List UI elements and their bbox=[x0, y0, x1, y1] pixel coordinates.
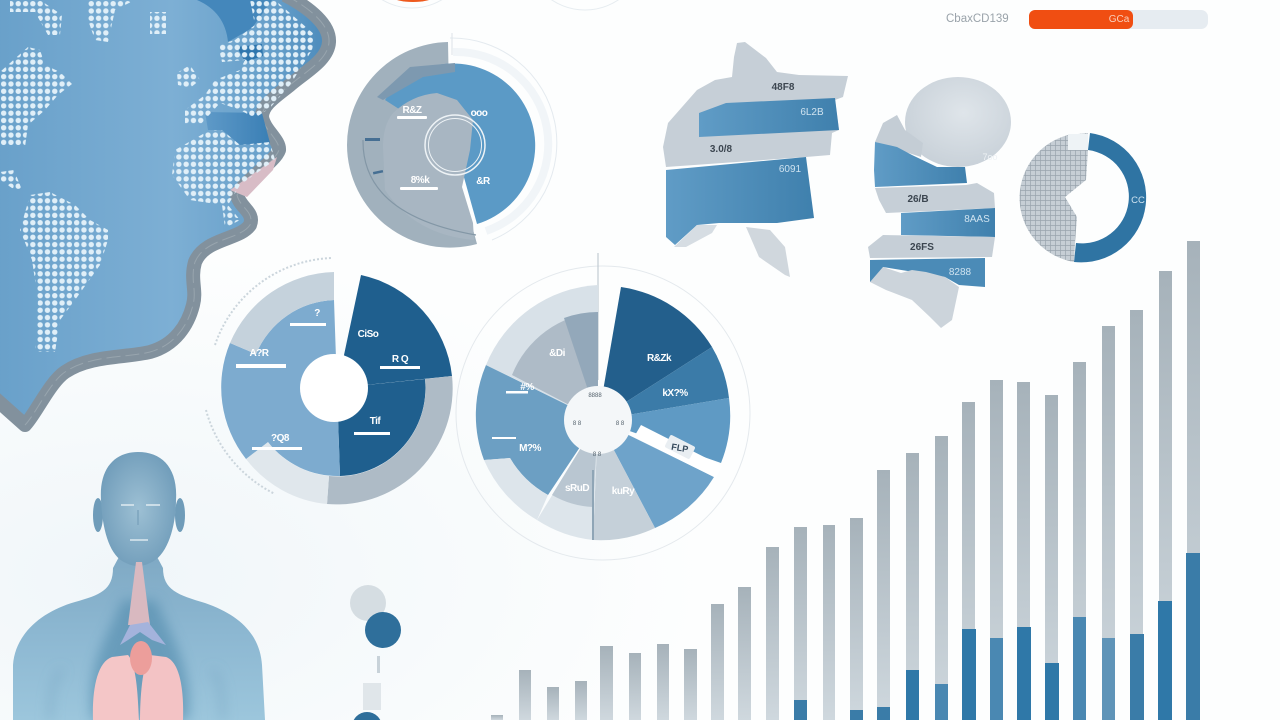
upper-left ring bbox=[230, 272, 334, 354]
gray band 1 bbox=[875, 183, 995, 213]
faint dashed rings bbox=[206, 258, 332, 494]
bar track bbox=[1029, 10, 1208, 29]
connector bbox=[377, 656, 380, 673]
panel: right pie chart bbox=[456, 253, 750, 560]
mid blue sector bbox=[221, 300, 340, 476]
dotted continents bbox=[0, 0, 315, 352]
blue bars bbox=[794, 553, 1200, 720]
inner gray bottom bbox=[552, 420, 598, 507]
map fill and outline bbox=[0, 0, 329, 425]
spike bbox=[746, 227, 790, 277]
top piece bbox=[875, 115, 923, 157]
hub tiny labels: 8 8 bbox=[593, 452, 602, 458]
panel: left region chart bbox=[663, 42, 848, 277]
syringe callout: FLP bbox=[671, 442, 689, 454]
pale sector bbox=[537, 420, 598, 540]
pie icons bbox=[492, 348, 688, 497]
arm creases bbox=[50, 670, 223, 720]
light blue sector bbox=[598, 420, 714, 528]
pie icons: ?Q8 bbox=[271, 433, 290, 444]
labels: 8AAS bbox=[964, 214, 990, 225]
pale tip bbox=[674, 225, 717, 247]
left blue sector bbox=[476, 365, 598, 495]
darker wedge bbox=[564, 312, 598, 420]
pie icons: &Di bbox=[549, 348, 566, 359]
bar label: CbaxCD139 bbox=[946, 13, 1009, 25]
blue sector bbox=[385, 64, 535, 224]
gray ring bbox=[327, 376, 453, 504]
divider bbox=[592, 470, 594, 540]
labels: 3.0/8 bbox=[710, 144, 733, 155]
gray band 2 bbox=[868, 235, 995, 258]
panel: right region chart bbox=[868, 77, 1011, 328]
bar chart bbox=[491, 241, 1200, 720]
labels: 6L2B bbox=[800, 107, 824, 118]
labels bbox=[710, 82, 824, 175]
pie icons: #% bbox=[520, 382, 534, 393]
face features bbox=[121, 505, 160, 540]
panel: left pie chart bbox=[206, 258, 453, 504]
left pale ring bbox=[484, 458, 548, 520]
hub tiny labels: 8888 bbox=[588, 393, 602, 399]
syringe callout bbox=[634, 425, 722, 478]
pie icons: R Q bbox=[392, 354, 409, 365]
hub tiny labels: 8 8 bbox=[573, 421, 582, 427]
gauge icons: 8%k bbox=[411, 175, 430, 186]
panel: world map head silhouette bbox=[0, 0, 329, 425]
top-left ring bbox=[486, 285, 598, 420]
panel: gauge donut chart bbox=[347, 33, 557, 248]
faint outer ring bbox=[456, 266, 750, 560]
blue band upper bbox=[699, 98, 839, 137]
pie icons: M?% bbox=[519, 443, 542, 454]
lower pale shape bbox=[870, 267, 959, 328]
pie icons: kuRy bbox=[612, 486, 635, 497]
inner gray region bbox=[383, 93, 474, 240]
gauge icons bbox=[397, 105, 491, 190]
gauge icons: R&Z bbox=[402, 105, 422, 116]
trachea bbox=[128, 562, 150, 625]
inner gray top bbox=[512, 312, 598, 420]
panel: small hatched donut bbox=[1020, 133, 1146, 262]
panel: human figure with lungs bbox=[13, 452, 265, 720]
labels: 26FS bbox=[910, 242, 934, 253]
left lung bbox=[93, 655, 139, 720]
pie icons: Tif bbox=[370, 416, 381, 427]
pale square bbox=[363, 683, 381, 710]
dark sector upper bbox=[337, 275, 452, 388]
labels: 48F8 bbox=[772, 82, 795, 93]
panel: legend circles bbox=[350, 585, 401, 720]
medium sector bbox=[598, 347, 729, 420]
labels: 6091 bbox=[779, 164, 802, 175]
hatched region bbox=[1020, 133, 1088, 262]
blue band 2 bbox=[901, 208, 995, 237]
bar value text: GCa bbox=[1109, 14, 1130, 25]
labels bbox=[907, 152, 998, 278]
pie icons: A?R bbox=[249, 348, 270, 359]
cheek highlight bbox=[230, 157, 277, 197]
head bbox=[101, 452, 176, 566]
gauge icons: &R bbox=[476, 176, 491, 187]
heart area bbox=[130, 641, 152, 675]
pale ring bbox=[246, 442, 329, 504]
blue arc bbox=[1074, 133, 1146, 262]
pie icons: CiSo bbox=[358, 329, 379, 340]
right lung bbox=[140, 655, 183, 720]
small label box bbox=[1068, 134, 1088, 150]
bar value bbox=[1029, 10, 1133, 29]
dark seas bbox=[197, 0, 272, 145]
labels: 8288 bbox=[949, 267, 972, 278]
pie icons bbox=[236, 308, 420, 450]
labels: 7oo bbox=[982, 152, 998, 162]
ticks bbox=[365, 138, 383, 175]
gray sector bbox=[593, 420, 655, 540]
dark sector bbox=[598, 287, 712, 420]
blue band lower bbox=[666, 157, 814, 245]
labels: 26/B bbox=[907, 194, 929, 205]
blue circle bbox=[365, 612, 401, 648]
top orange arc and faint rings bbox=[354, 0, 645, 10]
gray sector bbox=[347, 42, 477, 248]
hub bbox=[564, 386, 632, 454]
centre ring bbox=[425, 115, 485, 175]
pie icons: sRuD bbox=[565, 483, 589, 494]
blue band 1 bbox=[874, 142, 967, 187]
mid blue sector bbox=[598, 398, 730, 463]
bronchi bbox=[120, 622, 166, 645]
panel: top-right progress bar bbox=[946, 10, 1208, 29]
hub tiny labels bbox=[573, 393, 625, 458]
gray bars bbox=[491, 241, 1200, 720]
gray back shape bbox=[663, 42, 848, 167]
sphere bbox=[905, 77, 1011, 167]
vertical marker bbox=[597, 253, 599, 380]
faint outer ring bbox=[450, 33, 557, 240]
donut value: CC bbox=[1131, 195, 1145, 206]
ears bbox=[93, 498, 185, 532]
pie icons: ? bbox=[314, 308, 320, 319]
dark strip bbox=[377, 63, 455, 100]
blue band 3 bbox=[870, 258, 985, 287]
blue semicircle bbox=[352, 712, 382, 720]
hub tiny labels: 8 8 bbox=[616, 421, 625, 427]
gauge icons: ooo bbox=[471, 108, 488, 119]
dark sector lower bbox=[337, 379, 425, 476]
pie icons: R&Zk bbox=[647, 353, 672, 364]
chest shading bbox=[91, 600, 189, 720]
body bbox=[13, 555, 265, 720]
pie icons: kX?% bbox=[662, 388, 688, 399]
gray circle bbox=[350, 585, 386, 621]
centre hole bbox=[300, 354, 368, 422]
